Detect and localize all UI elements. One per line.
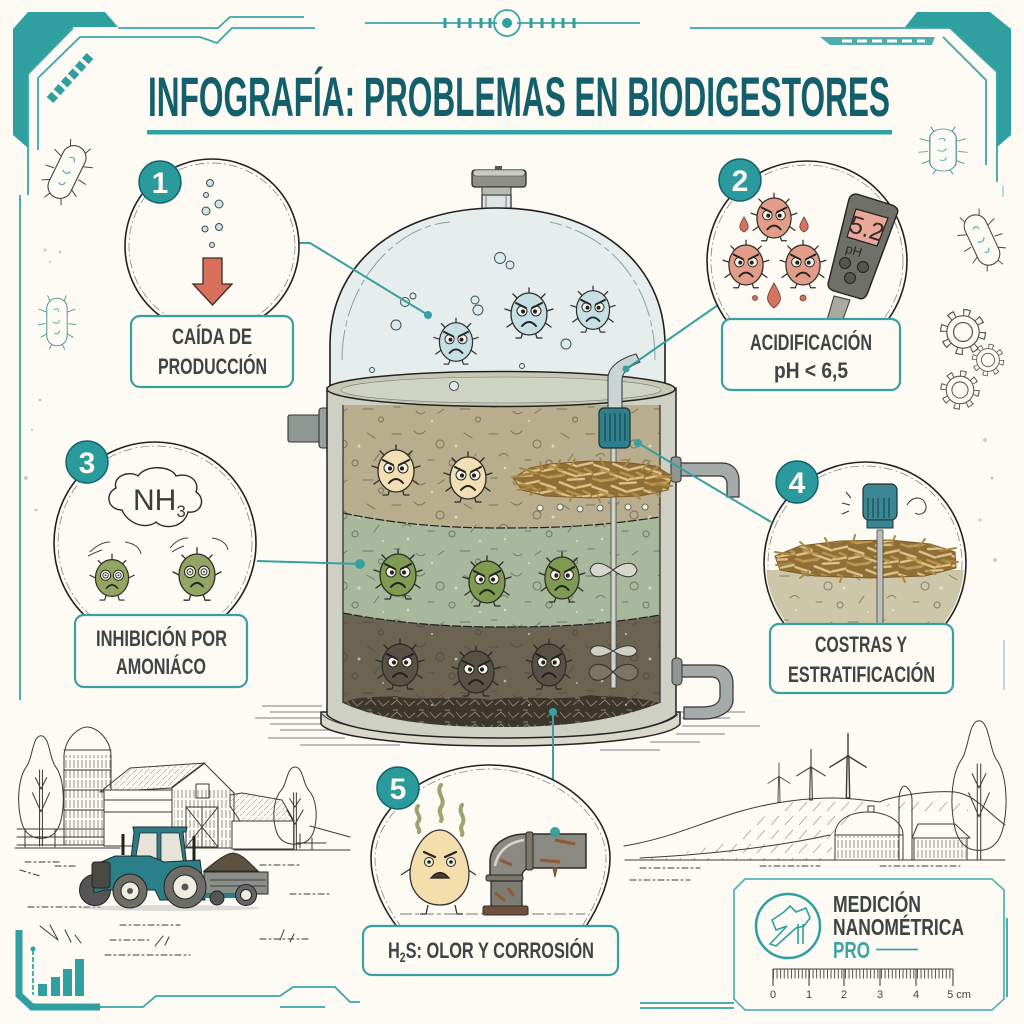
badge 1: [139, 161, 181, 203]
icon: odor waves: [417, 785, 463, 835]
microbes: bottom layer: [376, 639, 572, 696]
logo panel: medicion nanometrica: NANOMÉTRICA: [833, 913, 964, 940]
label 3: INHIBICIÓN POR: [96, 626, 227, 651]
landscape right: [624, 721, 1006, 880]
farm scene left: [15, 727, 350, 955]
badge 1: 1: [152, 167, 168, 200]
badge 4: [776, 461, 818, 503]
ruler: 4: [913, 989, 919, 1001]
label 5: S: OLOR Y CORROSIÓN: [406, 938, 594, 963]
mixer: shaft, motor, blades: [589, 354, 640, 688]
microbes: top layer: [372, 445, 492, 502]
icon: NH3 cloud: 3: [176, 502, 186, 521]
icon: NH3 cloud: NH: [133, 484, 176, 517]
ruler: 2: [841, 989, 847, 1001]
badge 3: [66, 441, 108, 483]
icon: NH3 cloud: [109, 468, 202, 527]
logo text: MEDICIÓN: [833, 890, 921, 917]
icon: red down arrow: [193, 258, 232, 305]
label 2: [722, 319, 900, 390]
panel 4: crusts: [760, 461, 970, 693]
floating crust: [512, 458, 672, 512]
icon: angry egg: [401, 830, 476, 914]
ruler: 1: [806, 989, 812, 1001]
microbes in dome: [434, 286, 615, 364]
icon: pH meter: 5.2: [846, 210, 887, 247]
icon: pH meter: [827, 194, 898, 322]
side microbes and gears: [24, 127, 1014, 562]
label 4: COSTRAS Y: [815, 632, 907, 657]
logo panel: medicion nanometrica: PRO: [833, 937, 870, 963]
title underline: [147, 130, 892, 134]
ruler: 0: [770, 989, 776, 1001]
tractor: [80, 827, 268, 911]
ruler: 3: [877, 989, 883, 1001]
label 2: ACIDIFICACIÓN: [750, 330, 872, 355]
label 4: [770, 624, 953, 693]
icon: pH meter: pH: [844, 241, 864, 260]
panel 3: ammonia: [54, 441, 256, 687]
icon: corroded pipe: [483, 827, 586, 915]
icon: dizzy microbes: [88, 538, 228, 600]
bubbles in dome: [370, 252, 571, 388]
label 3: [75, 615, 247, 687]
ruler: [770, 969, 971, 1001]
label 1: CAÍDA DE: [172, 324, 252, 349]
connectors: [257, 243, 771, 830]
label 5: [363, 926, 618, 975]
label 1: [131, 316, 293, 387]
label 1: PRODUCCIÓN: [158, 354, 267, 379]
badge 5: [377, 767, 419, 809]
label 4: ESTRATIFICACIÓN: [788, 662, 935, 687]
label 5: H: [388, 938, 404, 963]
icon: soil and straw: [766, 530, 964, 623]
badge 4: 4: [789, 467, 806, 500]
microbes: middle layer: [374, 549, 585, 606]
badge 5: 5: [390, 773, 406, 806]
digester tank body: [288, 372, 680, 746]
icon: acid microbes: [723, 193, 826, 288]
icon: logo circle: [756, 894, 820, 958]
pipes on tank: [671, 457, 739, 719]
label 3: AMONIÁCO: [116, 654, 206, 679]
chart icon: bars bottom left: [19, 930, 100, 1007]
ground line: [400, 913, 585, 915]
logo panel: medicion nanometrica: [734, 879, 1004, 1010]
ground hatching under tank: [255, 706, 760, 750]
ruler: 5 cm: [947, 989, 971, 1001]
panel 1: production drop: [125, 159, 299, 387]
label 2: pH < 6,5: [774, 358, 848, 383]
digester: dome and neck: [330, 166, 665, 385]
icon: bubbles: [202, 180, 223, 248]
icon: motor: [842, 484, 926, 528]
badge 2: [719, 159, 761, 201]
badge 3: 3: [79, 447, 95, 480]
label 5: 2: [400, 949, 406, 965]
panel 5: H2S: [363, 765, 618, 975]
badge 2: 2: [732, 165, 748, 198]
icon: acid drops: [740, 217, 808, 308]
panel 2: acidification: [707, 159, 907, 390]
